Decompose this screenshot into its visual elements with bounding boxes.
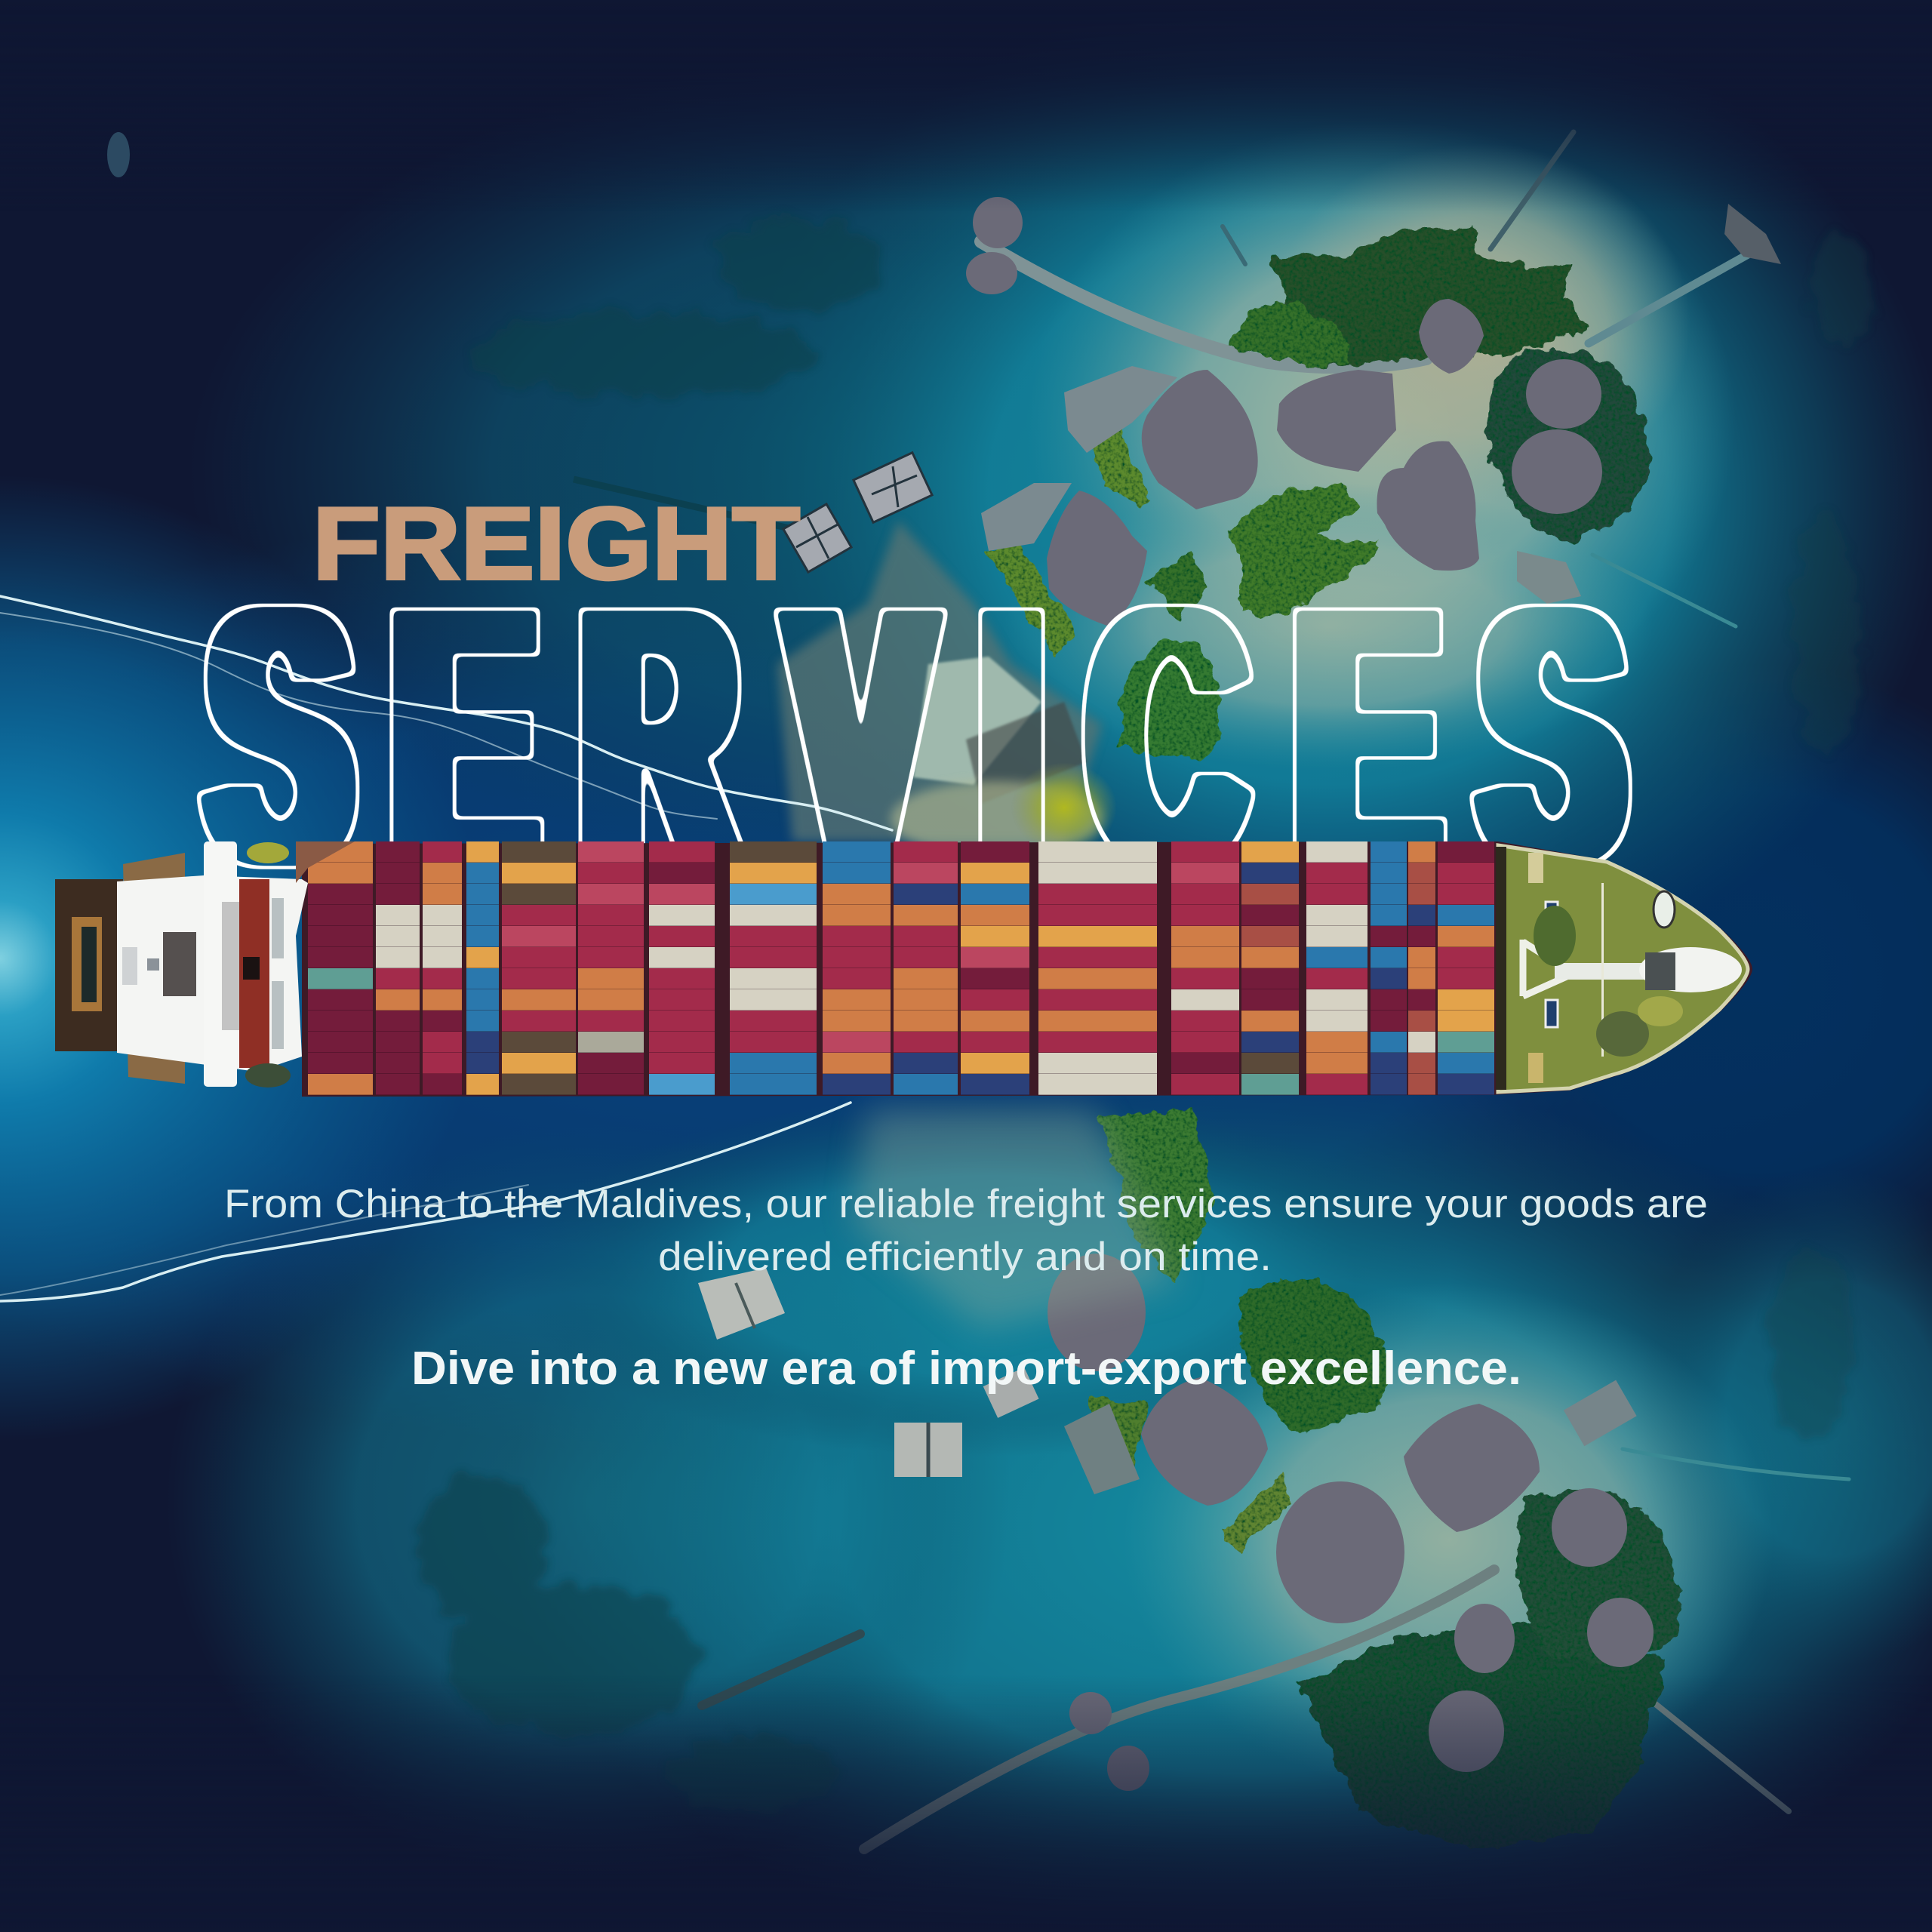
- bay 11: [1038, 841, 1157, 1095]
- bay 14: [1306, 841, 1367, 1095]
- ship wake: [0, 596, 892, 1301]
- bay 16: [1438, 841, 1494, 1095]
- causeways: [702, 1449, 1849, 1849]
- vegetation: [986, 226, 1650, 757]
- bay 15 right: [1408, 841, 1435, 1095]
- bay 3: [466, 841, 499, 1095]
- top edge vignette: [0, 0, 1932, 211]
- bay 15 left: [1371, 841, 1407, 1095]
- vegetation: [1087, 1109, 1680, 1849]
- bay 6: [649, 841, 715, 1095]
- bow deck: [1498, 845, 1748, 1092]
- description line 1: From China to the Maldives, our reliable freight services ensure your goods are: [224, 1182, 1708, 1226]
- bay 7: [730, 841, 817, 1095]
- bay 12: [1171, 841, 1239, 1095]
- stern deck: [55, 879, 123, 1051]
- bay 2 left: [376, 841, 420, 1095]
- junction: [296, 841, 355, 883]
- bridge wing: [204, 841, 237, 1087]
- bay 2 right: [423, 841, 462, 1095]
- container bays: [308, 841, 1494, 1095]
- bottom edge vignette: [0, 1675, 1932, 1932]
- foliage on stern edges: [247, 842, 289, 863]
- ship hull and bow: [302, 841, 1752, 1097]
- bow bulkhead: [1496, 847, 1506, 1090]
- boats near FREIGHT: [574, 453, 932, 572]
- aft brown deck: [123, 853, 185, 1084]
- bay 9: [894, 841, 958, 1095]
- bay 4: [502, 841, 576, 1095]
- top island group: [966, 132, 1781, 757]
- bay 10: [961, 841, 1029, 1095]
- description line 2: delivered efficiently and on time.: [658, 1235, 1272, 1279]
- gray roofs: [966, 197, 1602, 626]
- bay 5: [578, 841, 644, 1095]
- bow anchor equipment: [1523, 853, 1742, 1083]
- gray roofs: [1048, 1254, 1654, 1791]
- title word SERVICES (outlined): SERVICES: [209, 534, 1623, 939]
- bottom island group: [698, 1109, 1849, 1849]
- deckhouse white: [117, 875, 308, 1072]
- seagrass patches: [419, 219, 1872, 1811]
- title word FREIGHT: FREIGHT: [312, 486, 800, 601]
- pale reflection under ship: [853, 1109, 1177, 1328]
- central pale structure above ship: [777, 521, 1117, 857]
- bay 8: [823, 841, 891, 1095]
- tagline: Dive into a new era of import-export excellence.: [411, 1343, 1521, 1395]
- rubble shores: [981, 204, 1781, 604]
- small boat top left: [107, 132, 130, 177]
- pier huts: [698, 1268, 1637, 1494]
- bay 13: [1241, 841, 1299, 1095]
- causeways: [981, 132, 1751, 626]
- bay 1: [308, 841, 373, 1095]
